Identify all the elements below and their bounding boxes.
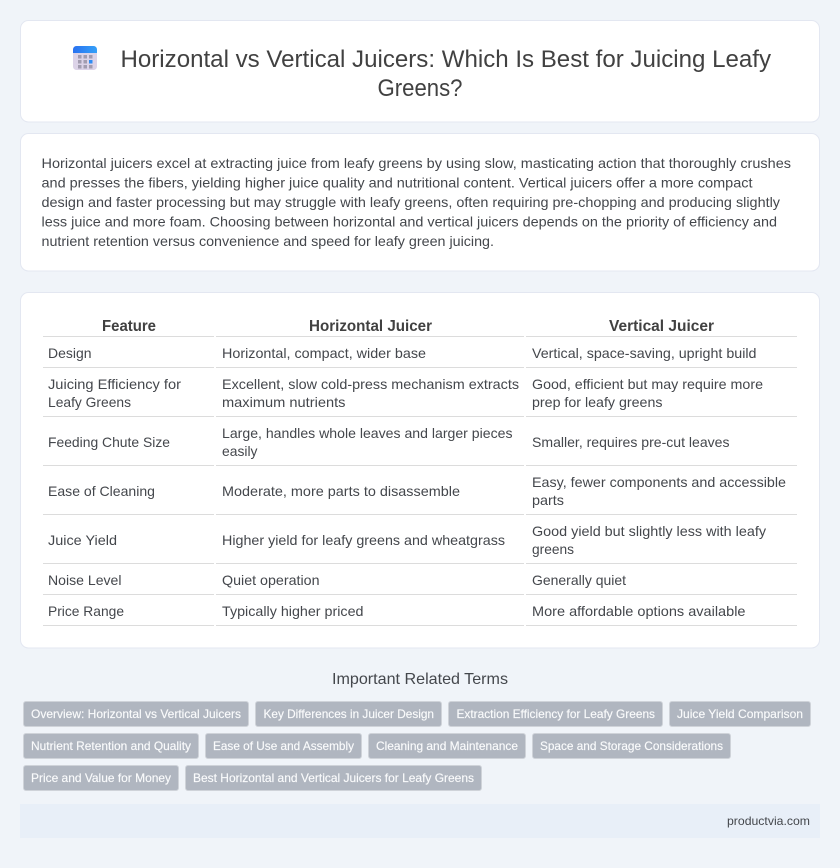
row: juice yield	[48, 523, 766, 557]
row: design: Vertical, space-saving, upright build	[532, 345, 756, 361]
tag: Cleaning and Maintenance	[376, 739, 518, 753]
row: ease of cleaning: parts	[532, 492, 564, 508]
row: price range: Typically higher priced	[222, 603, 364, 619]
row: feeding chute: Large, handles whole leaves and larger pieces	[222, 425, 512, 441]
row: juice yield: Higher yield for leafy greens and wheatgrass	[222, 532, 505, 548]
panel: summary text: and presses the fibers, yielding higher juice quality and nutritional content. Vertical juicers offer a more compact	[42, 174, 753, 190]
title: Horizontal vs Vertical Juicers: Which Is Best for Juicing Leafy	[120, 46, 771, 73]
row: juicing efficiency	[48, 376, 763, 410]
row: price range	[48, 603, 746, 619]
row: juice yield: Good yield but slightly less with leafy	[532, 523, 766, 539]
table header	[102, 318, 714, 335]
tag	[206, 734, 362, 758]
panel: comparison table	[20, 292, 820, 648]
row: ease of cleaning: Moderate, more parts to disassemble	[222, 483, 460, 499]
panel: summary text: design and faster processing but may struggle with leafy greens, often requiring pre-chopping and producing slightly	[42, 194, 780, 210]
panel: summary text	[20, 134, 820, 271]
tag: Ease of Use and Assembly	[213, 739, 354, 753]
row: noise level: Generally quiet	[532, 572, 626, 588]
row: juicing efficiency: prep for leafy greens	[532, 394, 662, 410]
footer bar	[20, 804, 820, 838]
row: feeding chute: Feeding Chute Size	[48, 434, 170, 450]
row: juicing efficiency: Excellent, slow cold-press mechanism extracts	[222, 376, 519, 392]
tag	[368, 734, 526, 758]
icon: calendar	[73, 46, 97, 70]
row: design	[48, 345, 756, 361]
table header: Feature	[102, 318, 156, 335]
tag: Nutrient Retention and Quality	[31, 739, 191, 753]
row: ease of cleaning: Ease of Cleaning	[48, 483, 155, 499]
tag	[24, 734, 198, 758]
row: design: Design	[48, 345, 92, 361]
row: juicing efficiency: Leafy Greens	[48, 394, 131, 410]
tag: Space and Storage Considerations	[540, 739, 723, 753]
tag	[24, 766, 178, 790]
panel: summary text: Horizontal juicers excel at extracting juice from leafy greens by using slow, masticating action that thoroughly crushes	[42, 155, 791, 171]
table header: Horizontal Juicer	[309, 318, 432, 335]
title	[120, 46, 771, 102]
panel: title card	[20, 20, 820, 122]
row: juicing efficiency: Juicing Efficiency for	[48, 376, 181, 392]
panel: summary text: less juice and more foam. Choosing between horizontal and vertical juicers depends on the priority of efficiency and	[42, 214, 777, 230]
tag	[448, 702, 662, 726]
row: price range: More affordable options available	[532, 603, 746, 619]
row: noise level: Quiet operation	[222, 572, 320, 588]
row: ease of cleaning	[48, 474, 786, 508]
row: ease of cleaning: Easy, fewer components and accessible	[532, 474, 786, 490]
row: price range: Price Range	[48, 603, 124, 619]
row: juice yield: greens	[532, 541, 574, 557]
table header: Vertical Juicer	[609, 318, 714, 335]
tag: Juice Yield Comparison	[677, 707, 803, 721]
tag: Extraction Efficiency for Leafy Greens	[456, 707, 655, 721]
tag: Key Differences in Juicer Design	[264, 707, 434, 721]
row: noise level: Noise Level	[48, 572, 122, 588]
row: design: Horizontal, compact, wider base	[222, 345, 426, 361]
panel: summary text: nutrient retention versus convenience and speed for leafy green juicing.	[42, 233, 494, 249]
row: feeding chute: easily	[222, 443, 258, 459]
tag	[532, 734, 730, 758]
row: feeding chute	[48, 425, 730, 459]
title: Greens?	[378, 75, 462, 102]
tag	[256, 702, 442, 726]
tag: Price and Value for Money	[31, 771, 171, 785]
row: juicing efficiency: maximum nutrients	[222, 394, 346, 410]
tag	[670, 702, 810, 726]
heading: important related terms: Important Related Terms	[332, 671, 508, 688]
tag	[24, 702, 248, 726]
tag: Overview: Horizontal vs Vertical Juicers	[31, 707, 241, 721]
related term tags	[24, 702, 810, 790]
row: juice yield: Juice Yield	[48, 532, 117, 548]
tag	[186, 766, 482, 790]
tag: Best Horizontal and Vertical Juicers for Leafy Greens	[193, 771, 474, 785]
row: juicing efficiency: Good, efficient but may require more	[532, 376, 763, 392]
row: feeding chute: Smaller, requires pre-cut leaves	[532, 434, 730, 450]
row: noise level	[48, 572, 626, 588]
footer bar: productvia.com	[727, 814, 810, 828]
